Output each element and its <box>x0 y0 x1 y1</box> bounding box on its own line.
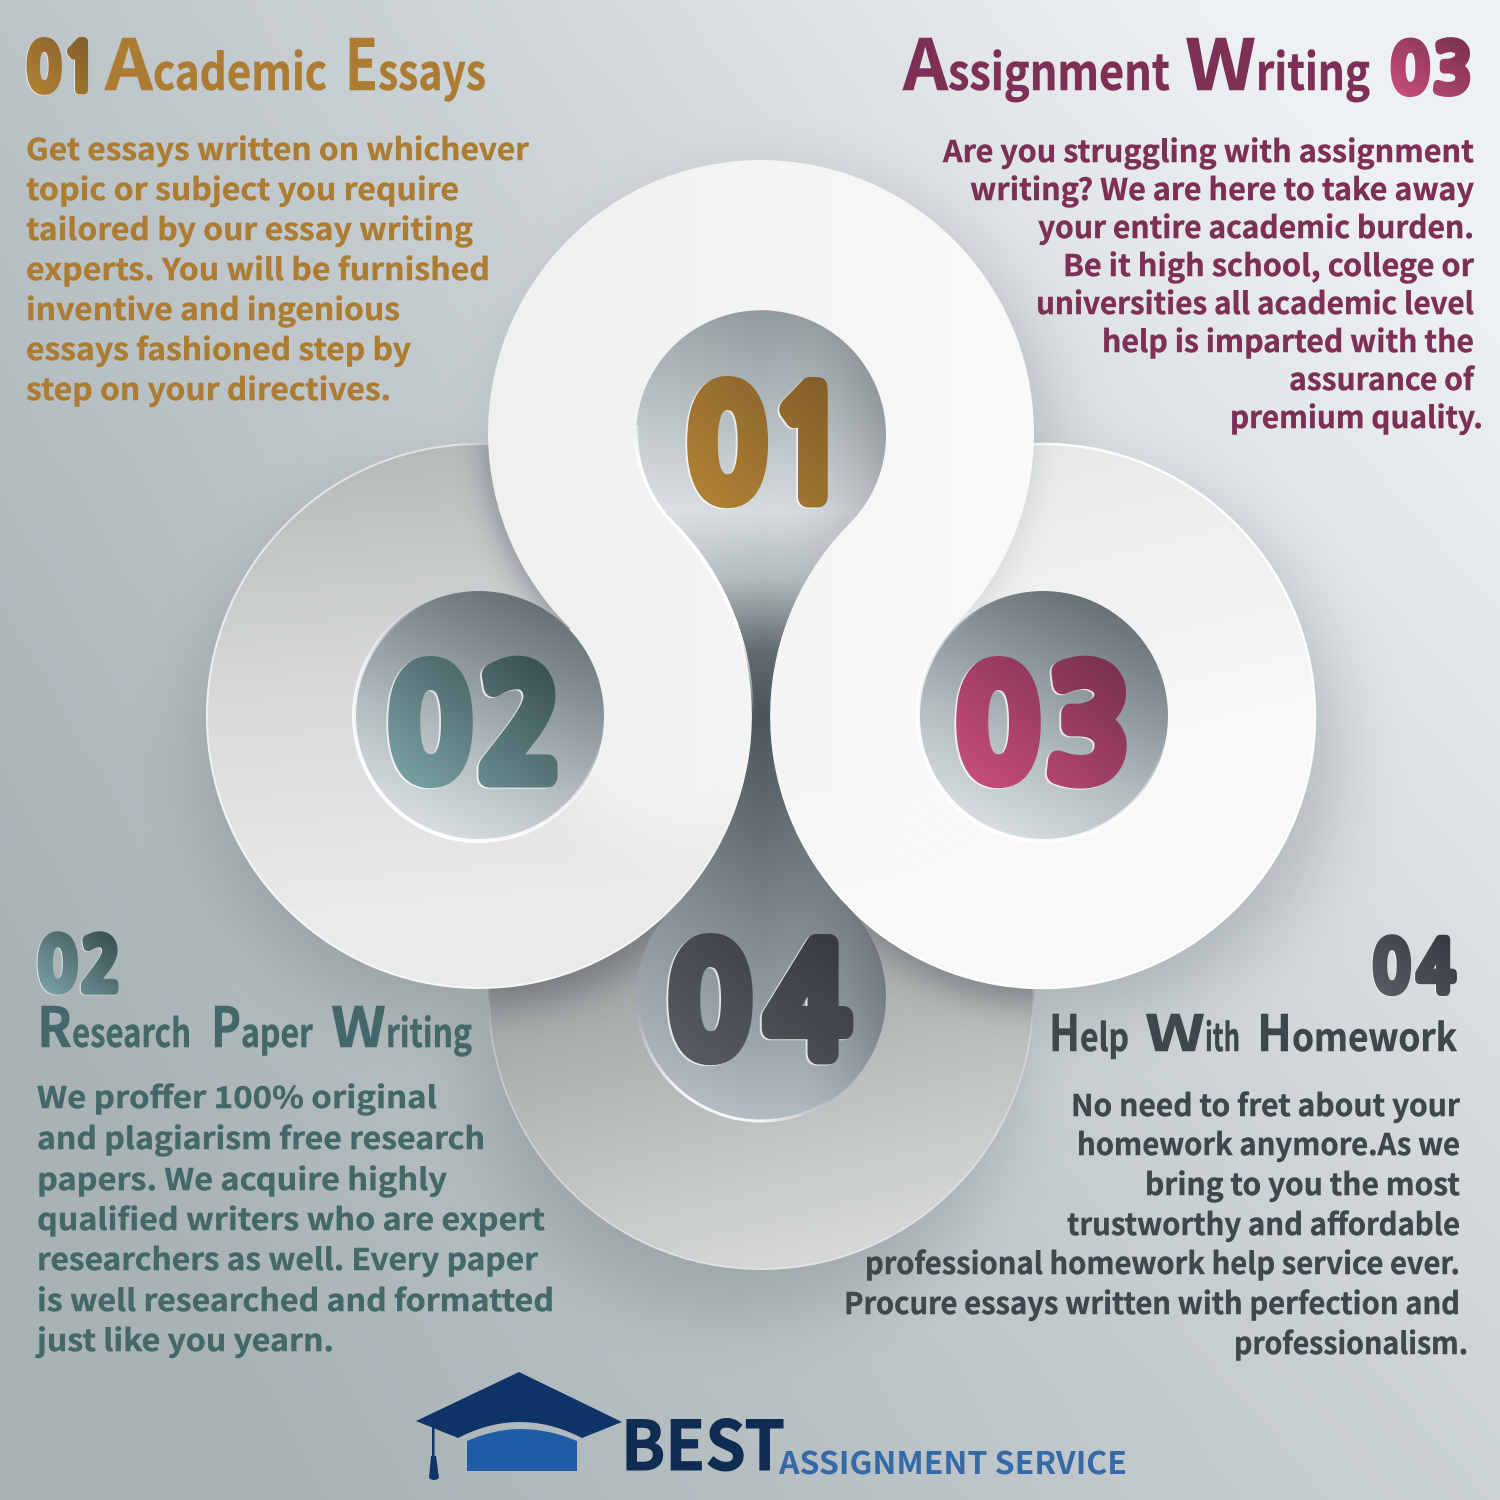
heading: help with homework: H <box>1049 994 1080 1066</box>
body text: academic essays: step on your directives. <box>26 365 391 409</box>
body text: assignment writing: writing? We are here to take away <box>970 165 1474 209</box>
right half of the S ribbon blending into the top ring <box>770 628 952 806</box>
body text: assignment writing: your entire academic burden. <box>1038 203 1474 247</box>
left half of the S ribbon blending into the top ring <box>570 628 752 832</box>
heading: help with homework: omework <box>1292 1007 1457 1062</box>
shadow of side rings on the bottom ring <box>488 910 1034 1024</box>
heading: research paper writing: W <box>331 983 386 1063</box>
small numeral 02: 02 <box>38 932 120 1002</box>
ring 01 top disc <box>488 160 1034 706</box>
heading: assignment writing: riting <box>1256 33 1370 105</box>
shadow of the top ring on the left ring <box>468 443 570 630</box>
central teardrop void with the 01 and 04 wells <box>630 300 890 1130</box>
body text: assignment writing: assurance of <box>1289 355 1476 399</box>
heading: help with homework: ith <box>1205 1007 1240 1062</box>
heading: assignment writing: A <box>902 10 949 111</box>
panel: research paper writing <box>35 932 554 1360</box>
body text: research paper writing: We proffer 100% original <box>37 1073 437 1117</box>
body text: assignment writing: universities all academic level <box>1036 279 1474 323</box>
heading: help with homework: W <box>1145 994 1205 1066</box>
body text: help with homework: professional homework help service ever. <box>865 1239 1460 1283</box>
big numeral 03: 03 <box>957 654 1130 801</box>
big numeral 01: 01 <box>688 374 849 520</box>
ring 03 right disc <box>770 443 1316 989</box>
body text: academic essays: experts. You will be furnished <box>26 245 490 289</box>
body text: help with homework: professionalism. <box>1234 1319 1468 1363</box>
small numeral 01: 01 <box>27 38 97 101</box>
body text: assignment writing: help is imparted with the <box>1102 317 1474 361</box>
heading: assignment writing: W <box>1185 10 1256 111</box>
body text: research paper writing: qualified writers who are expert <box>37 1195 545 1239</box>
heading: help with homework: H <box>1257 994 1292 1066</box>
soft shadows under the rings <box>195 182 1340 1315</box>
well 03 <box>918 591 1168 841</box>
heading: assignment writing: ssignment <box>948 33 1170 105</box>
wordmark: best: BEST <box>621 1391 785 1490</box>
body text: assignment writing <box>942 127 1483 437</box>
body text: research paper writing <box>35 1073 554 1360</box>
body text: help with homework: Procure essays written with perfection and <box>844 1279 1460 1323</box>
big numeral 02: 02 <box>389 654 562 801</box>
body text: assignment writing: premium quality. <box>1230 393 1483 437</box>
body text: assignment writing: Are you struggling with assignment <box>942 127 1474 171</box>
body text: research paper writing: researchers as well. Every paper <box>37 1235 539 1279</box>
body text: research paper writing: is well researched and formatted <box>37 1276 554 1320</box>
small numeral 04: 04 <box>1373 933 1455 1002</box>
heading: research paper writing: esearch <box>72 1003 191 1059</box>
body text: research paper writing: just like you yearn. <box>35 1316 334 1360</box>
shadow of the top ring on the right ring <box>952 443 1042 630</box>
heading: research paper writing: aper <box>241 1003 314 1059</box>
heading: help with homework: elp <box>1080 1007 1129 1062</box>
heading: academic essays: cademic <box>153 33 327 105</box>
body text: academic essays: topic or subject you require <box>26 165 459 209</box>
logo: best assignment service <box>416 1372 1127 1490</box>
panel: assignment writing <box>902 10 1483 437</box>
panel: academic essays <box>26 10 530 409</box>
heading: academic essays: ssays <box>378 33 486 105</box>
heading: research paper writing: riting <box>386 1003 472 1059</box>
body text: help with homework: homework anymore.As we <box>1077 1120 1460 1164</box>
heading: research paper writing: R <box>37 983 72 1063</box>
heading: academic essays: A <box>104 10 154 111</box>
wordmark: assignment service: ASSIGNMENT SERVICE <box>778 1438 1127 1483</box>
heading: academic essays: E <box>345 10 378 111</box>
body text: academic essays: inventive and ingenious <box>26 285 400 329</box>
well 02 <box>354 591 604 841</box>
ring 04 bottom disc <box>488 724 1034 1270</box>
body text: academic essays: Get essays written on whichever <box>26 125 530 169</box>
body text: research paper writing: papers. We acquire highly <box>37 1155 447 1199</box>
body text: help with homework: trustworthy and affordable <box>1067 1200 1460 1244</box>
ring 02 left disc <box>206 443 752 989</box>
body text: assignment writing: Be it high school, college or <box>1063 241 1475 285</box>
icon: graduation cap <box>416 1372 622 1480</box>
heading: research paper writing: P <box>211 983 241 1063</box>
body text: academic essays: tailored by our essay writing <box>26 205 473 249</box>
body text: research paper writing: and plagiarism free research <box>37 1114 485 1158</box>
big numeral 04: 04 <box>669 931 849 1078</box>
small numeral 03: 03 <box>1391 36 1472 103</box>
body text: academic essays: essays fashioned step by <box>26 325 411 369</box>
body text: academic essays <box>26 125 530 409</box>
body text: help with homework: bring to you the most <box>1145 1160 1460 1204</box>
panel: help with homework <box>844 933 1468 1363</box>
body text: help with homework <box>844 1081 1468 1363</box>
body text: help with homework: No need to fret about your <box>1071 1081 1461 1125</box>
